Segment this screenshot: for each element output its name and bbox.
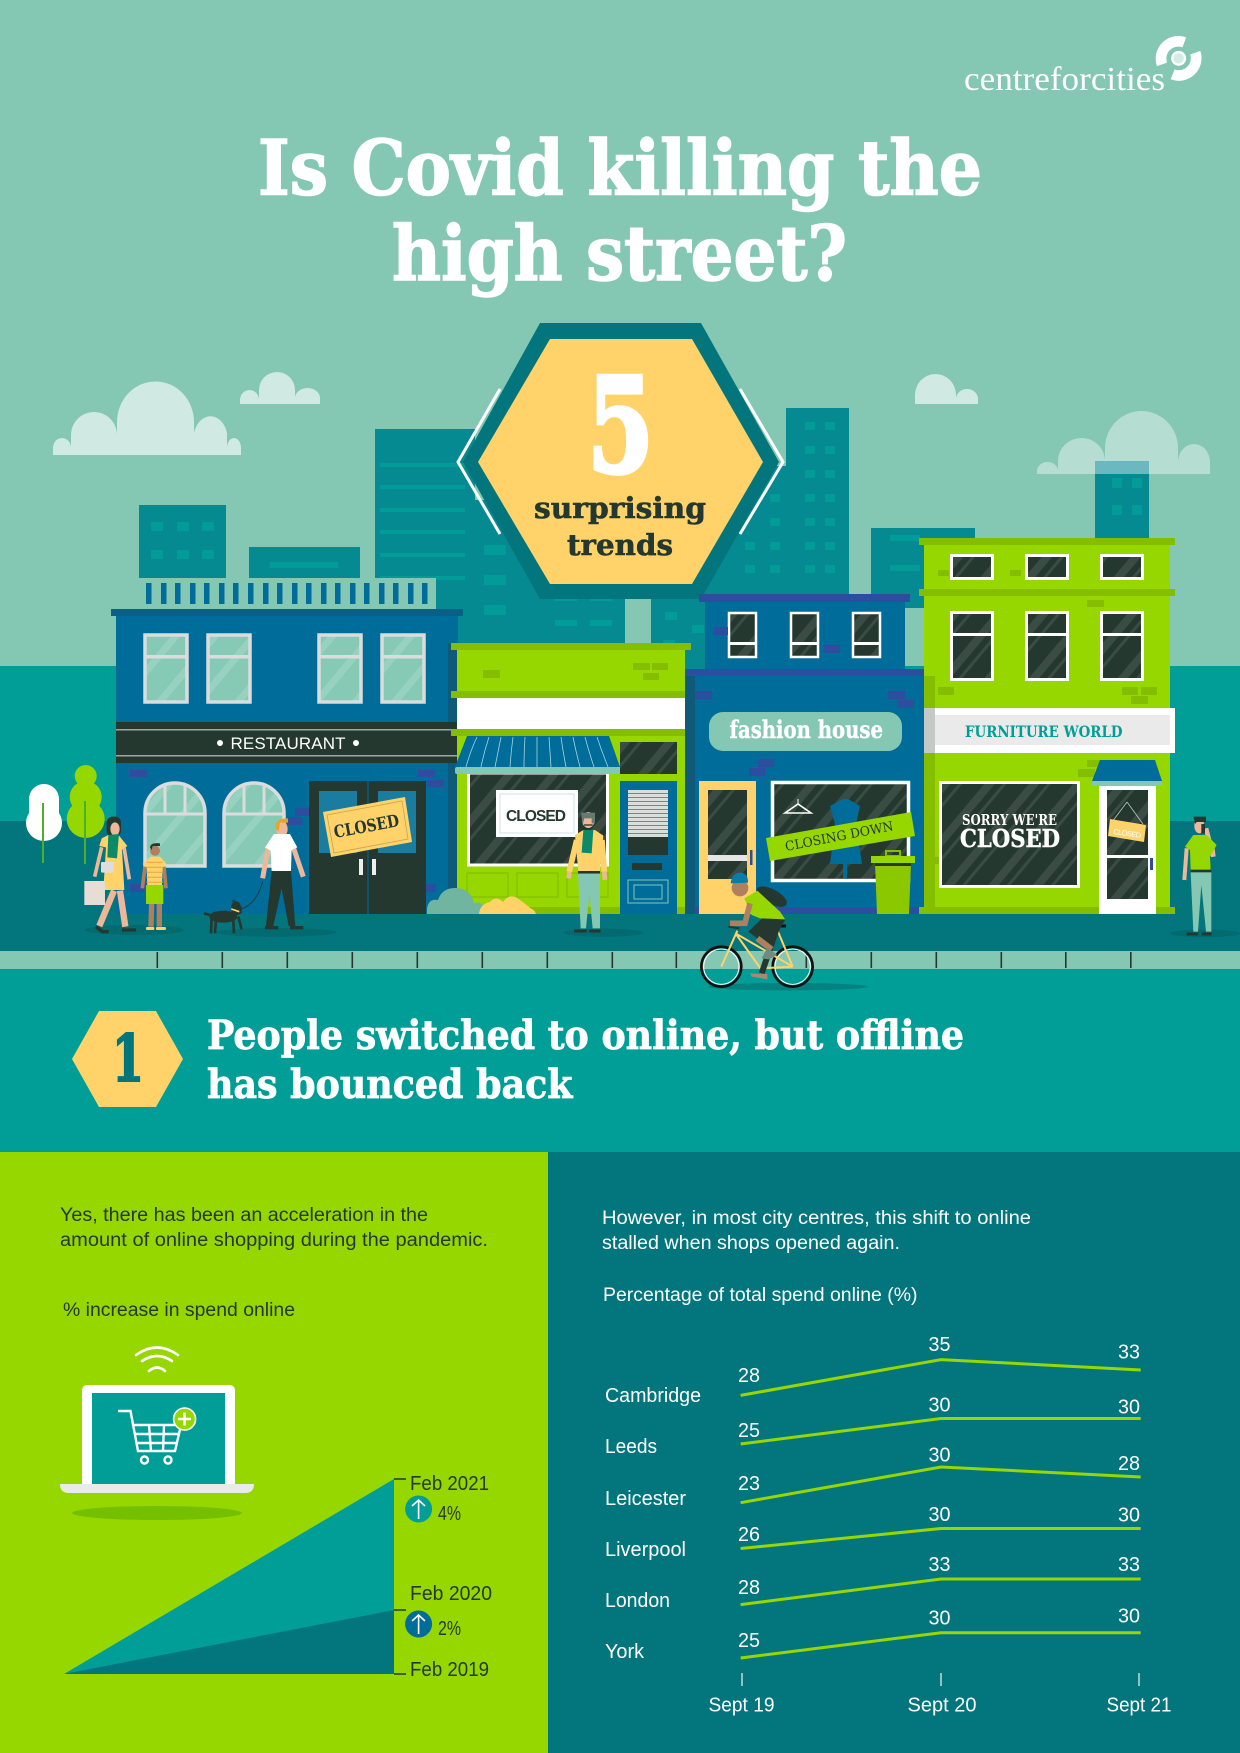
x axis: Sept 21	[1106, 1694, 1172, 1716]
area chart: Feb 2020	[410, 1583, 492, 1605]
hexagon badge: 5 surprising trends: surprising	[534, 491, 706, 525]
title	[258, 124, 982, 298]
city labels: London	[605, 1590, 670, 1612]
trees	[26, 765, 105, 864]
panel: share of spend online	[548, 1152, 1240, 1753]
hexagon number 1	[72, 1011, 183, 1107]
closing down banner: CLOSING DOWN	[784, 819, 895, 855]
icon: wifi	[136, 1348, 178, 1371]
small window and door	[620, 742, 677, 914]
cyclist	[701, 873, 868, 990]
x axis	[708, 1673, 1172, 1716]
intro text: amount of online shopping during the pandemic.	[60, 1230, 488, 1251]
chart subtitle: % increase in spend online	[63, 1300, 295, 1321]
upper windows	[729, 613, 880, 657]
sky background	[0, 0, 1240, 666]
hexagon badge: 5 surprising trends: 5	[587, 349, 654, 504]
logo: centreforcities	[964, 41, 1196, 98]
pavement	[0, 821, 1240, 951]
icon: up arrow 2%	[405, 1610, 432, 1638]
clouds	[53, 372, 1210, 474]
intro text	[60, 1205, 488, 1251]
section heading: trend 1: People switched to online, but offline	[207, 1012, 964, 1059]
panel: online spend increase	[0, 1152, 548, 1753]
building: closed shop	[451, 643, 691, 914]
furniture world sign	[924, 708, 1175, 753]
intro text	[602, 1208, 1031, 1254]
values: 28	[738, 1365, 760, 1387]
closing down banner	[766, 812, 915, 861]
shop window: CLOSED	[506, 808, 566, 825]
closed sign	[323, 797, 412, 857]
arched windows	[145, 783, 284, 866]
hexagon badge: 5 surprising trends	[458, 323, 783, 599]
city labels	[605, 1385, 701, 1663]
values: 35	[928, 1334, 950, 1356]
values	[738, 1334, 1140, 1652]
fashion window	[772, 782, 908, 880]
values: 28	[738, 1577, 760, 1599]
values: 30	[1118, 1396, 1140, 1418]
furniture world sign: FURNITURE WORLD	[965, 722, 1123, 741]
building: restaurant	[111, 578, 463, 914]
values: 25	[738, 1420, 760, 1442]
teal band behind street	[0, 666, 1240, 821]
intro text: However, in most city centres, this shift to online	[602, 1208, 1031, 1229]
values: 23	[738, 1473, 760, 1495]
area chart	[64, 1473, 492, 1681]
sorry we're closed window: SORRY WE'RE	[962, 811, 1057, 829]
section heading: trend 1: has bounced back	[207, 1061, 574, 1108]
values: 33	[1118, 1342, 1140, 1364]
yellow door	[699, 781, 756, 914]
hexagon number 1: 1	[112, 1021, 144, 1097]
city labels: Liverpool	[605, 1539, 686, 1561]
values: 30	[928, 1394, 950, 1416]
area chart: Feb 2019	[410, 1659, 489, 1681]
panels	[467, 873, 608, 897]
values: 30	[1118, 1504, 1140, 1526]
man	[263, 818, 303, 928]
city labels: York	[605, 1641, 645, 1663]
x axis: Sept 19	[708, 1694, 774, 1716]
people: woman, boy, man walking dog	[84, 817, 337, 937]
icon: laptop with shopping cart	[60, 1385, 254, 1520]
kerb	[0, 951, 1240, 969]
boy	[142, 843, 167, 930]
intro text: Yes, there has been an acceleration in the	[60, 1205, 428, 1226]
road section background	[0, 969, 1240, 1152]
area chart: Feb 2021	[410, 1473, 489, 1495]
section heading: trend 1	[72, 1011, 964, 1108]
person: shopkeeper	[563, 812, 643, 937]
white door with awning	[1092, 760, 1162, 914]
white door with awning: CLOSED	[1113, 827, 1142, 840]
woman	[84, 817, 136, 932]
area chart: 4%	[438, 1503, 461, 1525]
background city buildings	[139, 408, 1149, 681]
values: 26	[738, 1524, 760, 1546]
bushes	[427, 888, 536, 914]
values: 30	[1118, 1606, 1140, 1628]
values: 30	[928, 1444, 950, 1466]
restaurant sign: RESTAURANT	[230, 734, 346, 753]
top windows	[952, 556, 1142, 680]
city labels: Cambridge	[605, 1385, 701, 1407]
city labels: Leicester	[605, 1488, 686, 1510]
area chart: 2%	[438, 1618, 461, 1640]
line chart	[605, 1334, 1172, 1716]
person: man on phone	[1170, 817, 1240, 937]
values: 33	[1118, 1554, 1140, 1576]
values: 33	[928, 1554, 950, 1576]
shop window	[468, 773, 608, 865]
city labels: Leeds	[605, 1436, 657, 1458]
building: fashion house	[685, 594, 928, 914]
awning	[455, 736, 620, 774]
fashion house sign	[709, 712, 902, 751]
closed sign: CLOSED	[332, 811, 401, 843]
sorry we're closed window	[940, 782, 1078, 886]
values: 30	[928, 1608, 950, 1630]
restaurant balustrade	[139, 578, 436, 609]
upper windows	[145, 635, 424, 702]
values: 25	[738, 1630, 760, 1652]
chart subtitle: Percentage of total spend online (%)	[603, 1285, 918, 1306]
restaurant sign	[116, 722, 458, 763]
values: 30	[928, 1504, 950, 1526]
building: furniture world	[919, 538, 1175, 914]
fashion house sign: fashion house	[730, 715, 883, 744]
values: 28	[1118, 1453, 1140, 1475]
sorry we're closed window: CLOSED	[960, 824, 1060, 853]
title: Is Covid killing the	[258, 124, 982, 212]
intro text: stalled when shops opened again.	[602, 1233, 900, 1254]
title: high street?	[392, 209, 847, 298]
restaurant door	[309, 781, 426, 914]
logo: centreforcities: centreforcities	[964, 61, 1165, 98]
dog	[204, 882, 263, 933]
bin	[871, 851, 915, 914]
x axis: Sept 20	[908, 1694, 976, 1716]
icon: up arrow 4%	[405, 1496, 432, 1522]
rider	[730, 873, 790, 979]
hexagon badge: 5 surprising trends: trends	[567, 528, 673, 562]
